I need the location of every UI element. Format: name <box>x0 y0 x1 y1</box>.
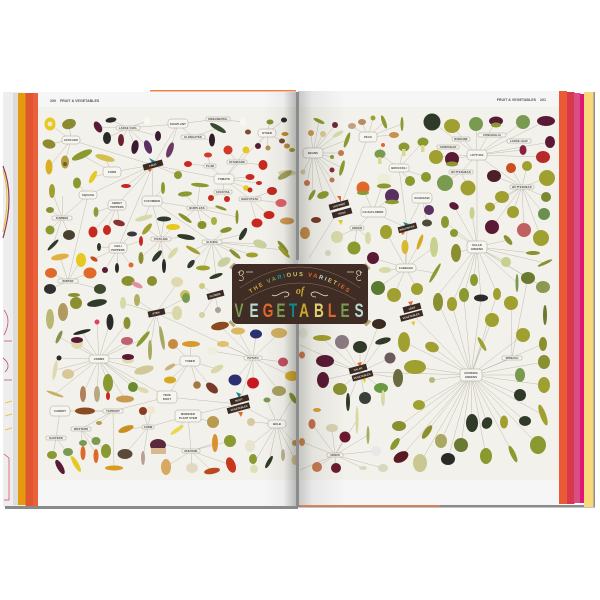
hub label: potato <box>244 356 262 360</box>
connector lines: cooking greens <box>300 278 544 470</box>
ribbon: legumes <box>329 196 352 225</box>
ribbon: brassicas: BRASSICAS <box>399 224 415 232</box>
hub label: standard: STANDARD <box>229 160 245 164</box>
hub label: burpless <box>187 206 207 210</box>
hub label: corm <box>142 425 154 429</box>
hub label: tuber <box>180 356 200 366</box>
hub label: squash <box>79 191 97 199</box>
hub label: beans: BEANS <box>308 151 318 155</box>
hub label: green <box>350 226 364 230</box>
hub label: cauliflower: CAULIFLOWER <box>363 210 383 214</box>
hub label: salad greens: SALAD <box>472 243 482 247</box>
icons: roots <box>46 298 155 402</box>
hub label: sweet peppers <box>108 200 126 210</box>
icons: tomatoes <box>174 118 287 228</box>
hub label: loose leaf: LOOSE LEAF <box>510 139 528 143</box>
hub label: summer: SUMMER <box>56 216 68 220</box>
hub label: slicing <box>202 240 222 244</box>
hub label: loose leaf <box>507 139 531 143</box>
hub label: large <box>116 126 140 130</box>
gutter fold, lower <box>296 324 299 506</box>
ribbon: leaf vegetables <box>400 301 423 326</box>
hub label: lettuce: LETTUCE <box>470 153 484 157</box>
ribbon: salad vegetables: VEGETABLES <box>353 372 371 380</box>
hub label: spinach <box>502 356 522 360</box>
hub label: spinach: SPINACH <box>506 356 518 360</box>
hub label: kohlrabi: KOHLRABI <box>415 196 430 200</box>
hub label: corn <box>103 167 121 177</box>
hub label: taproot <box>103 409 123 413</box>
hub label: cucumber <box>142 196 162 206</box>
icons: broccoli and cauliflower <box>356 138 434 226</box>
hub label: onion: ONION <box>330 453 340 457</box>
hub label: carrot: CARROT <box>54 409 66 413</box>
icons: lettuce <box>424 114 555 246</box>
ribbon: brassicas <box>398 222 417 235</box>
hub label: elongated: ELONGATED <box>184 135 202 139</box>
ribbon: stem: STEM <box>152 310 160 316</box>
hub label: bulb: BULB <box>273 422 281 426</box>
icons: cabbage <box>331 225 461 302</box>
hub label: winter <box>58 279 78 283</box>
hub label: plum: PLUM <box>206 164 215 168</box>
hub label: butterhead: BUTTERHEAD <box>451 170 471 174</box>
icons: avocado <box>42 117 77 174</box>
hub label: western: WESTERN <box>74 427 88 431</box>
hub label: taproot: TAPROOT <box>106 409 120 413</box>
hub label: carrot <box>50 406 70 416</box>
hub label: cabbage <box>396 264 416 272</box>
ribbon: fruit: FRUIT <box>149 162 158 168</box>
arc title: the various varieties: THE VARIOUS VARIETIES <box>248 272 350 293</box>
center flourishes <box>272 292 328 297</box>
icons: winter squash <box>44 252 106 329</box>
connector lines: legumes and brassicas <box>303 118 435 295</box>
icons: cooking greens <box>389 293 550 472</box>
hub label: ornamental: ORNAMENTAL <box>208 117 228 121</box>
ribbon: stem <box>148 308 165 318</box>
connector lines: stem and flower <box>123 285 218 350</box>
hub label: pickling: PICKLING <box>154 237 168 241</box>
ribbon: salad vegetables: SALAD <box>353 366 363 372</box>
hub label: summer <box>52 216 72 220</box>
hub label: potato: POTATO <box>247 356 259 360</box>
icons: peppers <box>88 184 143 273</box>
hub label: cooking greens: COOKING <box>464 371 478 375</box>
hub label: slicing: SLICING <box>206 240 218 244</box>
hub label: cos <box>478 133 506 137</box>
connector lines: root vegetables <box>53 313 295 471</box>
ribbon: root vegetables: ROOT <box>235 397 244 403</box>
hub label: cucumber: CUCUMBER <box>144 199 160 203</box>
hub label: cauliflower <box>361 207 386 217</box>
connector lines: cucumber family <box>141 185 283 276</box>
hub label: salad greens <box>467 241 487 253</box>
icons: tubers and potatoes <box>164 320 299 396</box>
banner arcs <box>240 267 360 300</box>
hub label: green: GREEN <box>352 226 362 230</box>
hub label: broccoli: BROCCOLI <box>391 166 407 170</box>
hub label: rhizome <box>182 449 200 453</box>
ribbon: flower: FLOWER <box>209 292 221 298</box>
ribbon: leaf vegetables: VEGETABLES <box>402 312 420 320</box>
right page <box>298 91 559 506</box>
hub label: eggplant <box>168 119 188 128</box>
hub label: romaine <box>452 137 470 141</box>
icons: corms and rhizomes <box>139 406 255 475</box>
hub label: oakleaf: BUTTERHEAD <box>512 185 532 189</box>
icons: taproots and carrots <box>47 408 135 475</box>
hub label: true root <box>157 391 177 403</box>
right page header: FRUIT & VEGETABLES 201 <box>497 98 546 102</box>
icons: peas <box>348 115 404 147</box>
connector lines: fruit family <box>49 119 284 289</box>
hub label: beefsteak: BEEFSTEAK <box>241 197 259 201</box>
ribbon: legumes: LEGUMES <box>332 201 346 209</box>
icons: tomato and bean strays near gutter <box>276 132 296 259</box>
hub label: true root: TRUE <box>163 393 171 397</box>
hub label: beefsteak <box>239 197 261 201</box>
hub label: plum <box>204 164 216 168</box>
hub label: cocktail: COCKTAIL <box>216 190 230 194</box>
hub label: other <box>258 129 276 137</box>
hub label: sweet peppers: PEPPERS <box>110 205 124 209</box>
ribbon: salad vegetables <box>349 362 373 383</box>
icons: bulbs on left page <box>249 392 298 473</box>
hub label: modified plant stem <box>175 410 201 422</box>
icons: cucumbers <box>135 182 268 280</box>
hub label: winter: WINTER <box>62 279 74 283</box>
icons: salad vegetables <box>298 319 403 411</box>
hub label: tomato <box>214 174 234 184</box>
hub label: corm: CORM <box>144 425 153 429</box>
hub label: ornamental <box>206 117 230 121</box>
hub label: peas: PEAS <box>364 135 372 139</box>
icons: beans <box>300 117 352 256</box>
gutter shading, right page <box>298 91 346 505</box>
hub label: oakleaf <box>510 185 534 189</box>
hub label: eggplant: EGGPLANT <box>170 122 186 126</box>
hub label: sweet peppers: SWEET <box>112 201 122 205</box>
hub label: corn: CORN <box>108 170 116 174</box>
ribbon: fruit <box>143 158 163 172</box>
hub label: broccoli <box>389 164 409 172</box>
hub label: chili peppers: PEPPERS <box>111 248 125 252</box>
icons: summer squash <box>46 178 81 252</box>
ribbon: root vegetables <box>227 392 250 417</box>
connector lines: lettuce and salad greens <box>432 121 550 304</box>
hub label: large: LARGE OVAL <box>119 126 137 130</box>
hub label: avocado: AVOCADO <box>64 138 78 142</box>
ribbon: leaf vegetables: LEAF <box>408 305 416 311</box>
banner corner tabs <box>228 262 371 327</box>
icons: stem and flower vegetables <box>120 276 221 360</box>
gutter shading, left page <box>262 92 298 506</box>
hub label: cocktail <box>214 190 232 194</box>
hub label: standard <box>227 160 247 164</box>
icons: eggplants <box>92 117 251 159</box>
word: of: of <box>296 286 306 297</box>
banner background <box>232 264 368 324</box>
central title banner <box>228 262 372 328</box>
hub label: cabbage: CABBAGE <box>399 266 413 270</box>
hub label: romaine: ROMAINE <box>454 137 468 141</box>
hub label: western <box>71 427 91 431</box>
hub label: other: OTHER <box>262 131 272 135</box>
hub label: bulb <box>268 420 286 428</box>
hub label: eastern: EASTERN <box>49 436 63 440</box>
hub label: cooking greens: GREENS <box>465 375 477 379</box>
ribbon: legumes: PODS <box>338 210 346 216</box>
hub label: crisphead <box>437 145 459 149</box>
hub label: onion <box>327 453 343 457</box>
hub label: eastern <box>46 436 66 440</box>
hub label: cos: CONCHIGLIA <box>483 133 501 137</box>
main title: vegetables: V EGETA BLE S <box>234 300 364 322</box>
hub label: chili peppers <box>109 243 127 253</box>
icons: corn <box>71 147 115 184</box>
hub label: beans <box>303 148 323 158</box>
hub label: lettuce <box>467 150 487 160</box>
icons: salad greens <box>441 201 553 302</box>
hub label: butterhead <box>449 170 473 174</box>
hub label: rhizome: RHIZOME <box>184 449 198 453</box>
gutter fold <box>296 92 299 260</box>
left page edge stripes <box>18 93 39 506</box>
hub label: tuber: TUBER <box>185 359 195 363</box>
hub label: modified plant stem: PLANT STEM <box>179 416 198 420</box>
hub label: cooking greens <box>460 369 482 381</box>
hub label: modified plant stem: MODIFIED <box>181 412 195 416</box>
left page <box>38 90 298 506</box>
hub label: avocado <box>62 136 80 144</box>
corner flourishes <box>238 271 362 281</box>
hub label: burpless: BURPLESS <box>189 206 205 210</box>
right page edge stripes <box>559 91 594 507</box>
hub label: crisphead: CRISPHEAD <box>440 145 456 149</box>
hub label: elongated <box>181 135 205 139</box>
hub label: squash: SQUASH <box>82 193 94 197</box>
ribbon: root vegetables: VEGETABLES <box>230 404 248 412</box>
hub label: tomato: TOMATO <box>218 177 230 181</box>
hub label: root <box>89 355 109 363</box>
hub label: peas <box>359 132 377 142</box>
book back cover and edges <box>3 92 595 509</box>
hub label: root: CORMS <box>94 357 104 361</box>
left page header: 200 FRUIT & VEGETABLES <box>50 99 100 103</box>
hub label: kohlrabi <box>412 193 432 203</box>
ribbon: flower <box>206 290 224 300</box>
hub label: true root: ROOT <box>163 397 171 401</box>
hub label: salad greens: GREENS <box>471 247 483 251</box>
hub label: chili peppers: CHILI <box>114 244 122 248</box>
hub label: pickling <box>151 237 171 241</box>
icons: onions <box>299 406 388 473</box>
